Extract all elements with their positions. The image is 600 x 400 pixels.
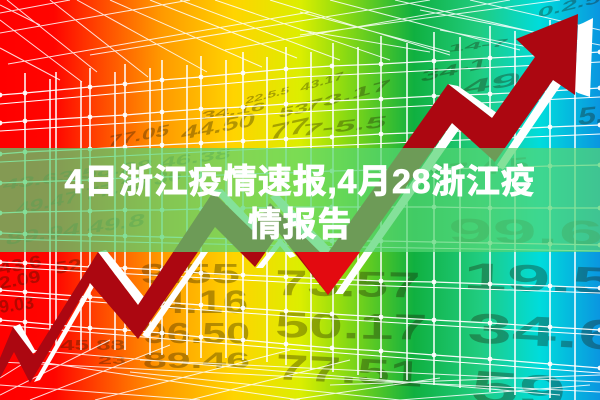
title text: 情报告 [248,206,352,244]
title text: 4日浙江疫情速报,4月28浙江疫 [64,163,536,201]
title banner [0,148,600,252]
background figures, upper: 49 [459,68,523,100]
background figures, lower: 19.5 [463,256,600,303]
background figures, lower [0,212,600,400]
background figures, lower: 89.46 [143,348,250,373]
background figures, upper: 53 [277,99,311,121]
background figures, upper: 7-5.5 [299,112,390,140]
background figures, upper: 34.16 [199,101,268,123]
background figures, upper: 77 [267,113,311,145]
background figures, upper: 22.5.5 [244,85,290,107]
background figures, lower: 4.16 [160,284,248,320]
background figures, upper [1,0,600,249]
background figures, upper: 77.05 [106,122,171,151]
background figures, lower: 52 [53,255,83,278]
arrow bright red section [296,252,360,295]
background figures, lower: 73.57 [275,262,421,306]
grid: upper perspective lines [0,0,600,82]
title text [64,163,536,244]
background figures, lower: 34.6 [467,304,600,359]
grid: horizontal rows with nodes [0,52,600,368]
background figures, upper: 43.63 58.28 46.38 [1,146,232,194]
background figures, lower: 45 88 [60,337,125,354]
background figures, lower: 99.6 [448,212,600,253]
background figures, lower: 77.51 [275,346,424,395]
grid: lower perspective lines [0,340,600,400]
background figures, upper: 14-7 [446,37,510,55]
background figures, upper: 44.50 [179,109,258,145]
background figures, upper: 9.57 4.5 [399,154,530,187]
grid: secondary row lines [0,62,600,373]
background figures, lower: 50.17 [275,304,428,348]
background figures, lower: 23 [98,355,126,367]
background figures, upper: 89.94 49.8 [4,209,147,249]
background figures, upper: 34-1 [419,54,490,86]
background figures, upper: 49.47 77.33 36 [14,164,183,219]
background figures, upper: 43.17 [300,69,345,95]
background figures, lower: 9.55 [140,258,240,289]
background figures, lower: 96.50 [143,318,250,350]
background figures, upper: 73.17 [302,76,392,115]
